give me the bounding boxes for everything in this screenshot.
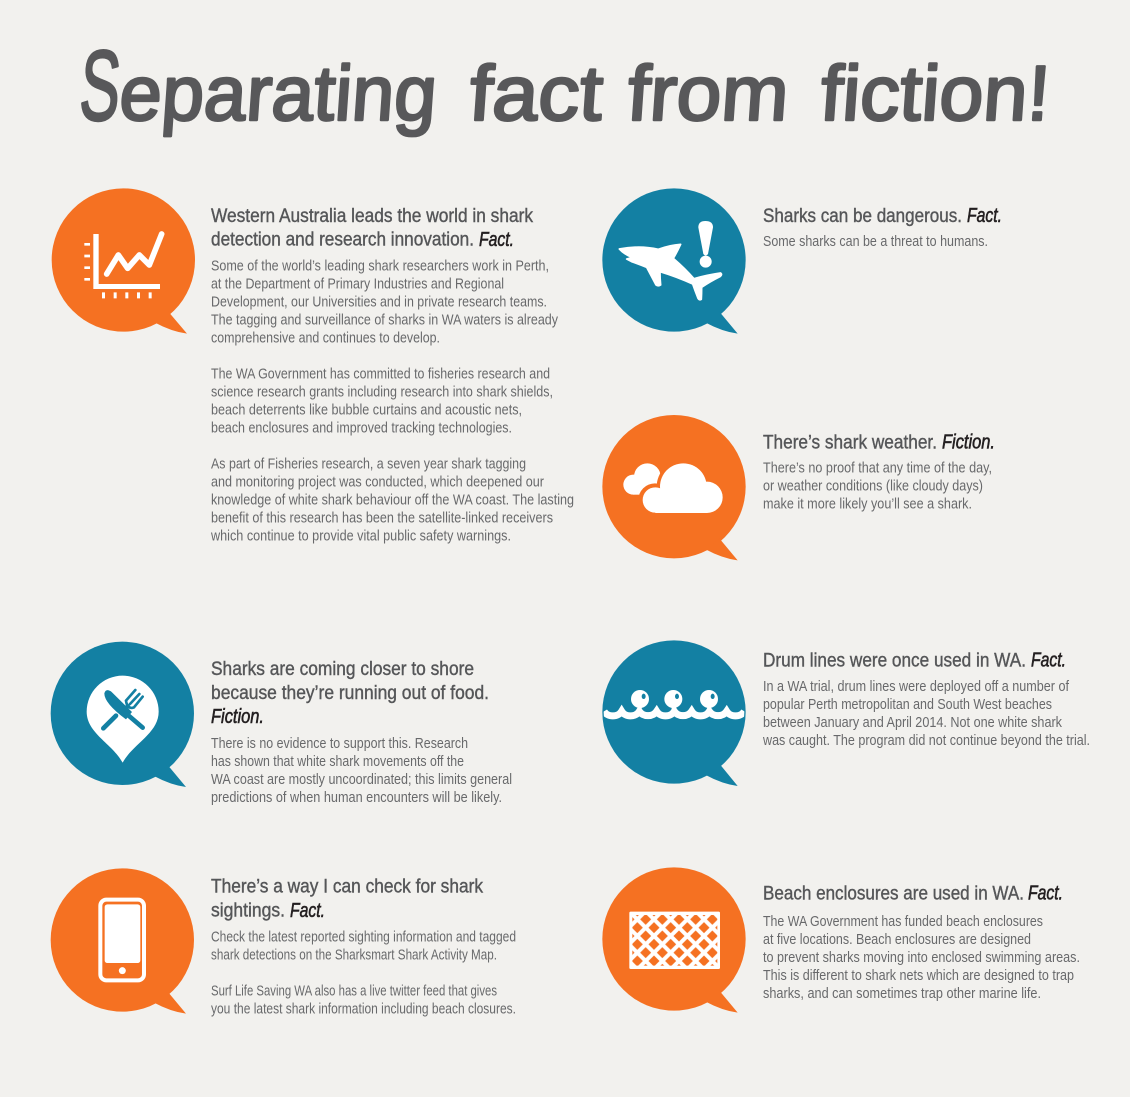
icon: clouds in orange speech bubble bbox=[602, 415, 746, 560]
body text: In a WA trial, drum lines were deployed off a number of bbox=[763, 679, 1070, 695]
panel: shark weather bbox=[602, 415, 995, 560]
icon: smartphone in orange speech bubble bbox=[51, 868, 194, 1014]
body text: has shown that white shark movements off the bbox=[211, 754, 464, 770]
body text bbox=[211, 930, 516, 1018]
body text: and monitoring project was conducted, which deepened our bbox=[211, 474, 544, 490]
body text: As part of Fisheries research, a seven year shark tagging bbox=[211, 456, 526, 472]
body text bbox=[210, 259, 574, 544]
body text: at five locations. Beach enclosures are designed bbox=[763, 932, 1031, 948]
heading bbox=[211, 205, 533, 251]
body text: There is no evidence to support this. Research bbox=[211, 736, 468, 752]
body text: comprehensive and continues to develop. bbox=[211, 331, 440, 347]
heading: sightings. bbox=[211, 900, 285, 922]
heading: Fiction. bbox=[942, 432, 995, 454]
heading: detection and research innovation. bbox=[211, 228, 474, 250]
body text: benefit of this research has been the satellite-linked receivers bbox=[211, 510, 553, 526]
body text: beach deterrents like bubble curtains and acoustic nets, bbox=[211, 402, 522, 418]
body text: to prevent sharks moving into enclosed swimming areas. bbox=[763, 950, 1080, 966]
heading: because they’re running out of food. bbox=[211, 682, 489, 704]
body text: beach enclosures and improved tracking technologies. bbox=[211, 420, 512, 436]
body text: predictions of when human encounters will be likely. bbox=[211, 790, 502, 806]
panel: check for shark sightings bbox=[51, 868, 516, 1018]
heading: Fact. bbox=[1031, 650, 1066, 672]
body text: was caught. The program did not continue beyond the trial. bbox=[762, 733, 1090, 749]
body text: at the Department of Primary Industries and Regional bbox=[211, 277, 504, 293]
icon: drum lines on waves in blue speech bubble bbox=[602, 640, 746, 786]
body text: between January and April 2014. Not one white shark bbox=[763, 715, 1063, 731]
heading: Fact. bbox=[290, 900, 325, 922]
body text: Some of the world’s leading shark researchers work in Perth, bbox=[211, 259, 549, 275]
heading bbox=[211, 658, 489, 728]
heading: There’s a way I can check for shark bbox=[211, 876, 483, 898]
body text: which continue to provide vital public safety warnings. bbox=[210, 528, 511, 544]
title: Separating bbox=[76, 30, 441, 142]
title: fiction! bbox=[818, 49, 1053, 137]
heading: There’s shark weather. bbox=[763, 432, 937, 454]
body text bbox=[763, 914, 1080, 1002]
body text: make it more likely you’ll see a shark. bbox=[763, 496, 972, 512]
body text: Development, our Universities and in private research teams. bbox=[211, 295, 547, 311]
body text: There’s no proof that any time of the day, bbox=[763, 460, 992, 476]
icon: shark with exclamation in blue speech bubble bbox=[602, 188, 746, 334]
body text: The WA Government has committed to fisheries research and bbox=[211, 366, 550, 382]
body text bbox=[211, 736, 512, 806]
icon: knife and fork pin in blue speech bubble bbox=[51, 642, 194, 787]
panel: shark research innovation bbox=[52, 188, 574, 544]
heading: Fact. bbox=[479, 229, 514, 251]
body text: The WA Government has funded beach enclosures bbox=[763, 914, 1043, 930]
body text: shark detections on the Sharksmart Shark Activity Map. bbox=[211, 948, 497, 964]
heading bbox=[211, 876, 483, 922]
body text: knowledge of white shark behaviour off the WA coast. The lasting bbox=[211, 492, 574, 508]
icon: net in orange speech bubble bbox=[602, 867, 746, 1013]
title: fact bbox=[467, 49, 606, 137]
body text: Surf Life Saving WA also has a live twitter feed that gives bbox=[211, 984, 497, 1000]
panel: sharks can be dangerous bbox=[602, 188, 1002, 334]
body text: you the latest shark information including beach closures. bbox=[211, 1002, 516, 1018]
body text: sharks, and can sometimes trap other marine life. bbox=[763, 986, 1041, 1002]
body text: popular Perth metropolitan and South West beaches bbox=[763, 697, 1052, 713]
panel: coming closer to shore bbox=[51, 642, 512, 806]
panel: drum lines bbox=[602, 640, 1090, 786]
body text: Some sharks can be a threat to humans. bbox=[763, 234, 988, 250]
title bbox=[76, 30, 1054, 142]
heading: Fact. bbox=[967, 205, 1002, 227]
heading: Fiction. bbox=[211, 706, 264, 728]
heading: Drum lines were once used in WA. bbox=[763, 650, 1026, 672]
heading: Beach enclosures are used in WA. bbox=[763, 882, 1024, 904]
title: from bbox=[625, 49, 792, 137]
body text: science research grants including research into shark shields, bbox=[211, 384, 553, 400]
body text: The tagging and surveillance of sharks in WA waters is already bbox=[211, 313, 559, 329]
body text: WA coast are mostly uncoordinated; this limits general bbox=[211, 772, 512, 788]
body text: This is different to shark nets which are designed to trap bbox=[763, 968, 1074, 984]
heading: Sharks can be dangerous. bbox=[763, 205, 962, 227]
body text: Check the latest reported sighting information and tagged bbox=[211, 930, 516, 946]
heading: Western Australia leads the world in shark bbox=[211, 205, 533, 227]
body text: or weather conditions (like cloudy days) bbox=[763, 478, 983, 494]
body text bbox=[762, 679, 1090, 749]
panel: beach enclosures bbox=[602, 867, 1080, 1013]
heading: Sharks are coming closer to shore bbox=[211, 658, 474, 680]
icon: chart in orange speech bubble bbox=[52, 188, 195, 334]
heading: Fact. bbox=[1028, 882, 1063, 904]
body text bbox=[763, 460, 992, 512]
